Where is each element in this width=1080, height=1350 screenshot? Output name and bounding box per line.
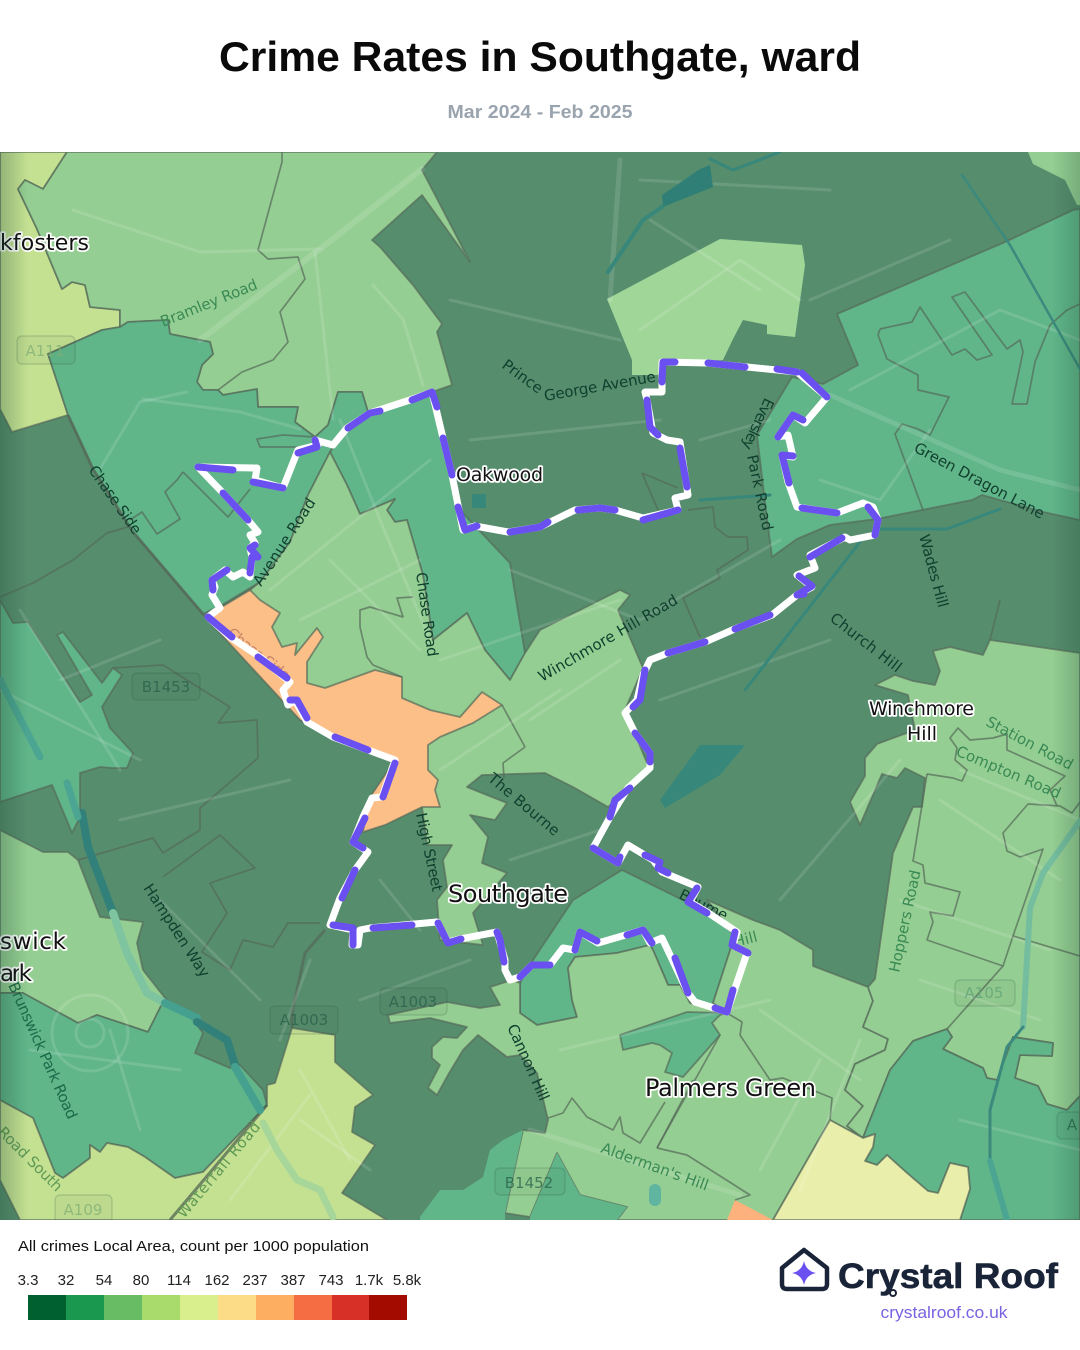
road name labels: Green Dragon Lane [911, 439, 1048, 523]
legend tick values: 743 [318, 1272, 344, 1289]
road name labels: Chase Side [224, 624, 294, 684]
road shields: A105 [965, 984, 1003, 1002]
legend tick values: 5.8k [393, 1272, 422, 1289]
legend tick values: 237 [242, 1272, 268, 1289]
legend tick values: 3.3 [18, 1272, 38, 1289]
road shields: A1003 [389, 993, 437, 1011]
place name labels: Oakwood [456, 464, 543, 486]
road name labels: Chase Side [85, 462, 145, 538]
road name labels: Brunswick Park Road [4, 979, 81, 1122]
road shields: B1452 [505, 1174, 553, 1192]
road name labels: Avenue Road [249, 495, 319, 589]
road name labels: Prince [499, 356, 546, 397]
road name labels: Waterfall Road [173, 1118, 264, 1222]
road name labels: Compton Road [953, 742, 1064, 802]
website link: crystalroof.co.uk [880, 1304, 1008, 1322]
road name labels: Eversley [738, 395, 778, 453]
road shields: A111 [26, 342, 64, 360]
road name labels: Bourne [676, 885, 731, 924]
place name labels: ark [0, 961, 33, 987]
road name labels: Church Hill [827, 609, 905, 676]
legend colour scale [28, 1295, 407, 1320]
road name labels: Winchmore Hill Road [535, 591, 681, 685]
road name labels: Bramley Road [158, 275, 260, 331]
road shields: A [1067, 1116, 1078, 1134]
legend tick values: 54 [96, 1272, 112, 1289]
road name labels: Hill [732, 928, 759, 951]
road name labels [0, 275, 1076, 1222]
water features [0, 152, 1080, 1220]
legend tick values: 80 [133, 1272, 149, 1289]
place name labels [0, 231, 974, 1102]
subtitle: date range: Mar 2024 - Feb 2025 [448, 101, 632, 122]
road name labels: Chase Road [412, 571, 442, 658]
road shields: A1003 [280, 1011, 328, 1029]
place name labels: Palmers Green [645, 1074, 816, 1102]
road name labels: Wades Hill [915, 532, 952, 609]
icon: Crystal Roof house logo [782, 1250, 827, 1289]
road shields: A109 [64, 1201, 102, 1219]
internal area borders [0, 152, 1080, 1220]
brand name: Crystal Roof [838, 1257, 1058, 1296]
legend tick values: 162 [204, 1272, 230, 1289]
road name labels: Hampden Way [140, 880, 214, 981]
place name labels: kfosters [0, 231, 89, 256]
legend tick values [18, 1272, 422, 1289]
road name labels: Alderman's Hill [599, 1139, 711, 1194]
place name labels: Hill [907, 723, 937, 745]
legend tick values: 387 [280, 1272, 306, 1289]
legend tick values: 32 [58, 1272, 74, 1289]
place name labels: Winchmore [869, 698, 974, 720]
road name labels: High Street [412, 811, 446, 893]
road name labels: Hoppers Road [885, 868, 925, 974]
minor road network [0, 160, 1080, 1200]
legend tick values: 114 [167, 1272, 191, 1289]
title: Crime Rates in Southgate, ward [219, 33, 861, 80]
place name labels: swick [0, 929, 67, 955]
road shields [17, 336, 1080, 1223]
map edge shading [0, 152, 1080, 1220]
road name labels: Station Road [983, 713, 1076, 774]
ward boundary: Southgate [198, 362, 878, 1012]
road shields: B1453 [142, 678, 190, 696]
choropleth areas [0, 152, 1080, 1220]
road name labels: George Avenue [543, 368, 657, 405]
legend tick values: 1.7k [355, 1272, 384, 1289]
road name labels: Cannon Hill [503, 1021, 553, 1104]
road name labels: The Bourne [484, 769, 563, 840]
choropleth map panel [0, 152, 1080, 1223]
road name labels: Park Road [743, 453, 777, 532]
place name labels: Southgate [448, 880, 568, 908]
legend title: All crimes Local Area, count per 1000 population [18, 1238, 369, 1255]
